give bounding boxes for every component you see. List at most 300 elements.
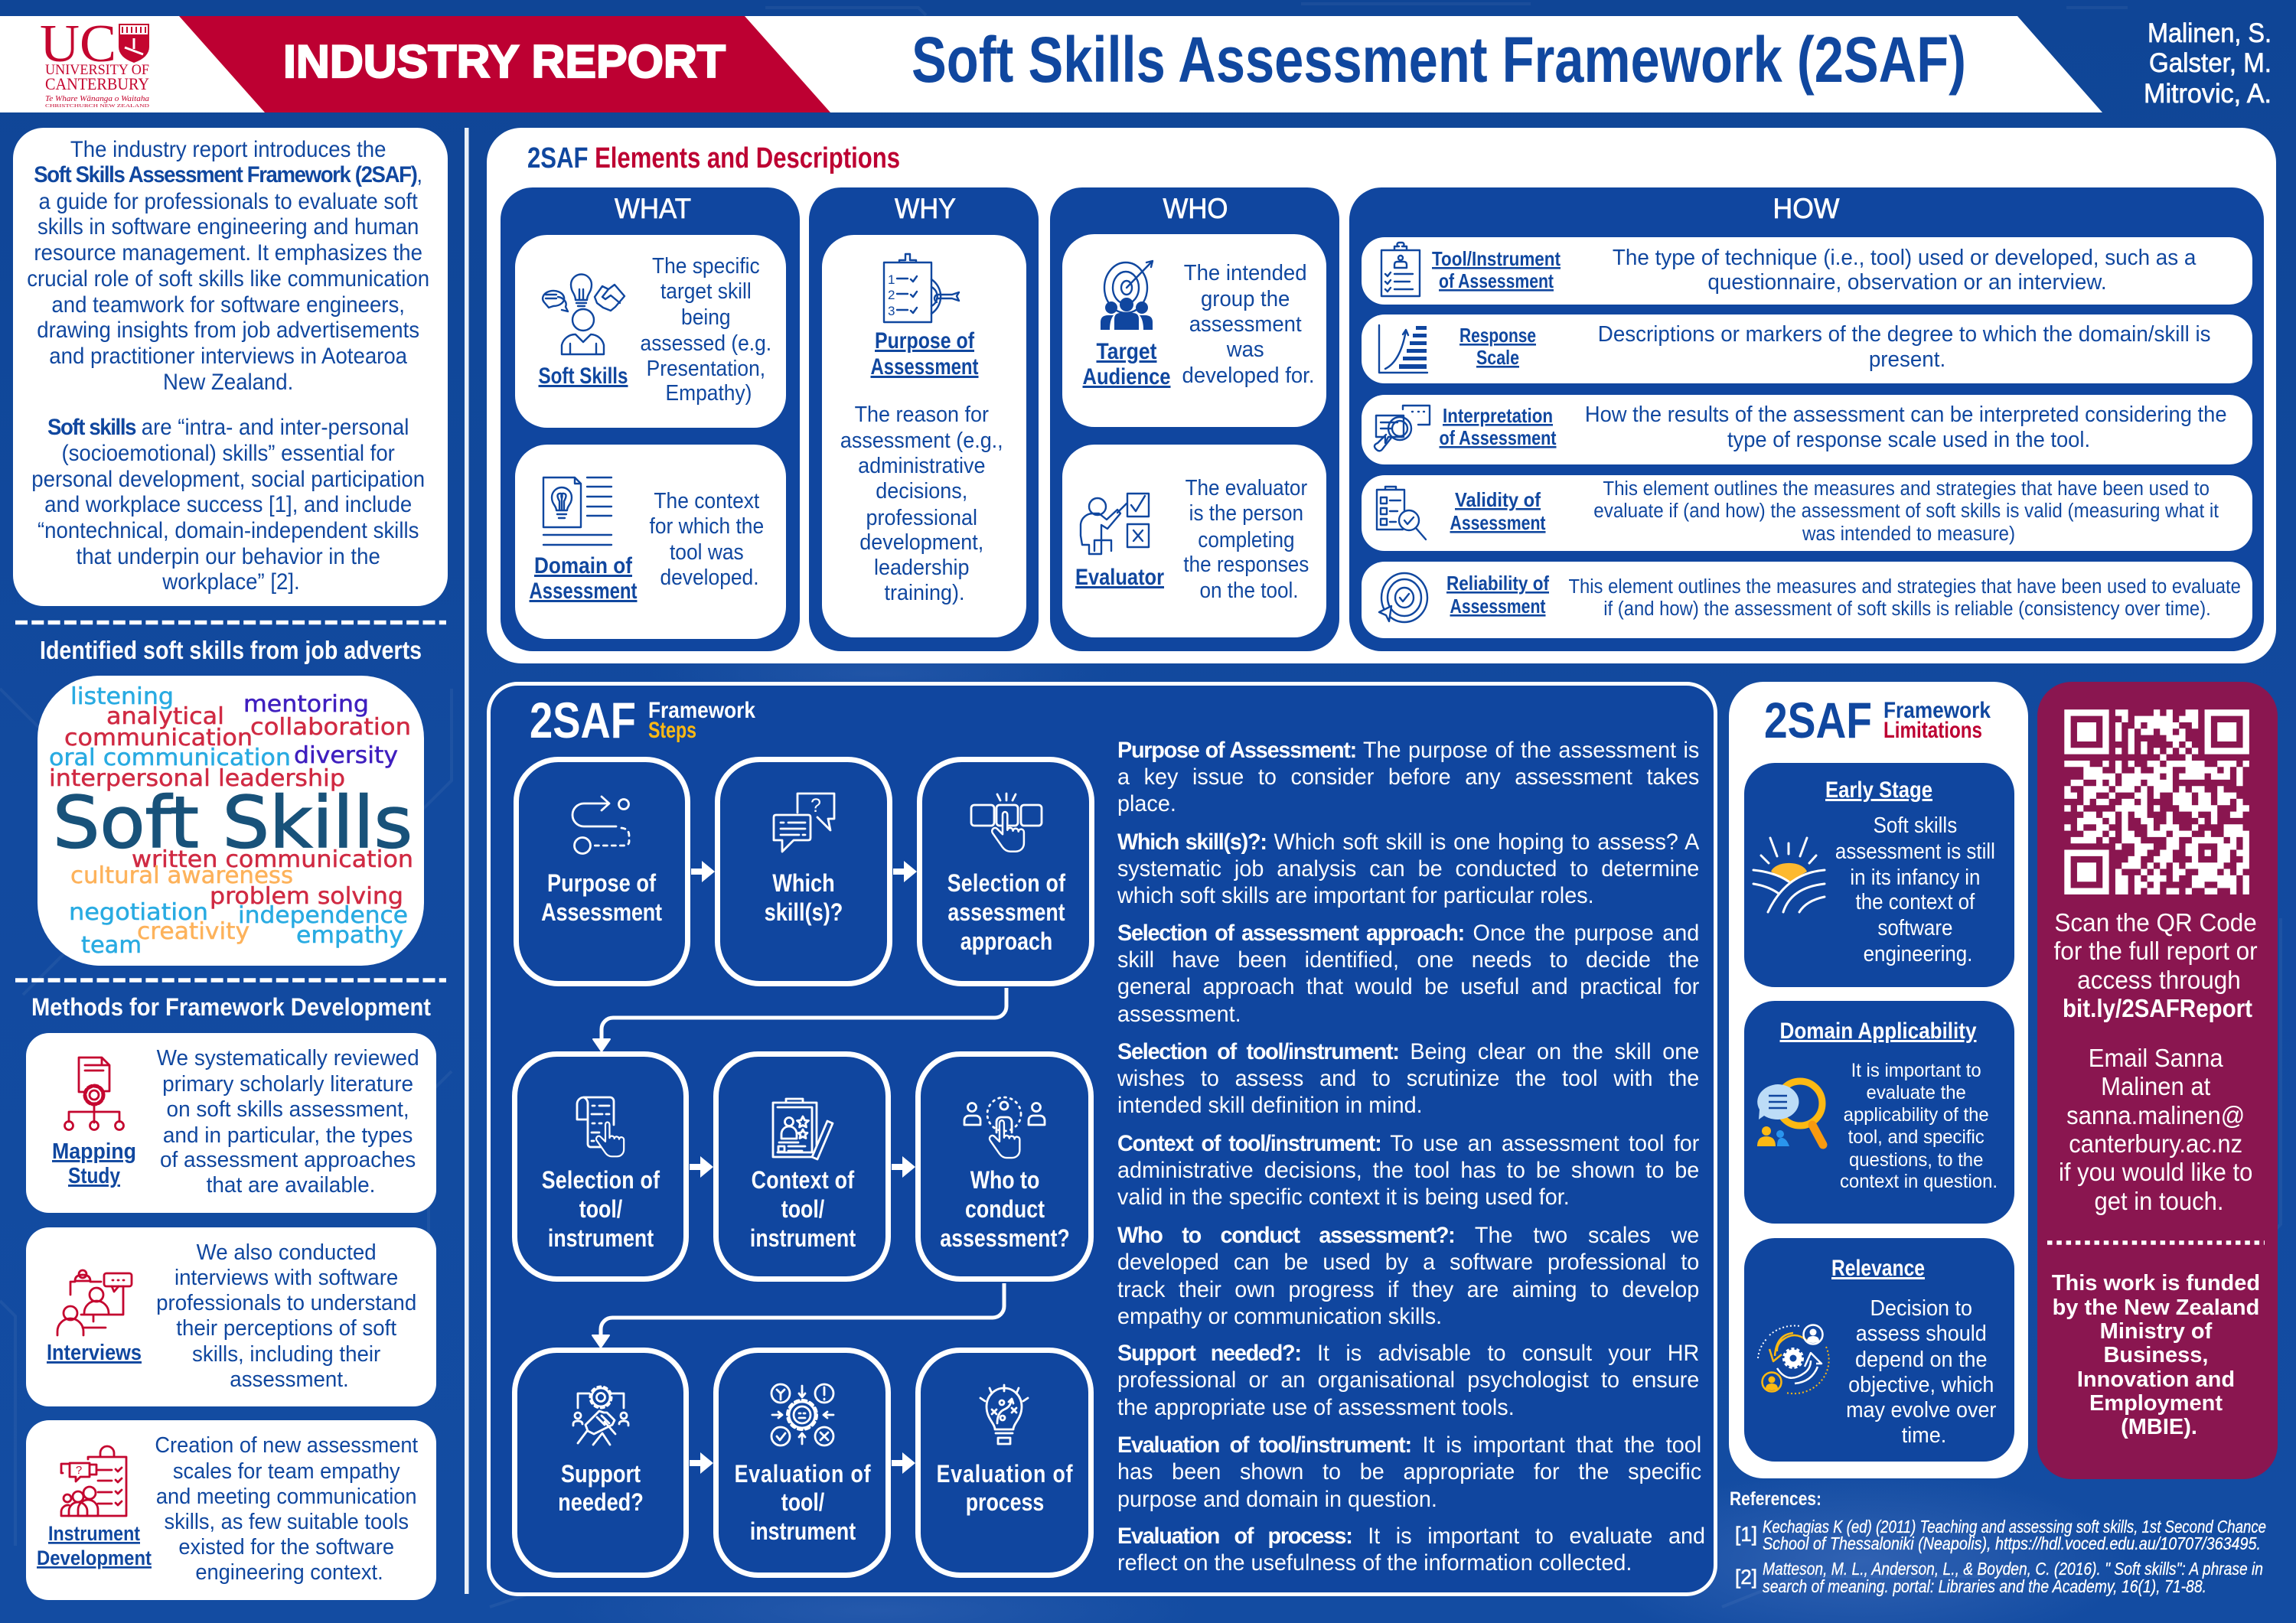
step description: which skills <box>1117 829 1699 908</box>
text: early stage: in its infancy in <box>1850 865 1980 889</box>
icon: interviews <box>57 1270 132 1335</box>
text: contact email: sanna.malinen@ <box>2066 1101 2245 1129</box>
text: instrument development: existed for the software <box>178 1534 394 1559</box>
label: reliability: Reliability of <box>1446 572 1549 595</box>
step description: selection of assessment approach: general approach that would be useful and practical for <box>1117 974 1699 999</box>
step description: evaluation of tool/instrument: purpose and domain in question. <box>1117 1487 1437 1512</box>
text: contact email: get in touch. <box>2095 1187 2223 1215</box>
label: reliability <box>1446 572 1549 618</box>
card: domain of assessment <box>515 445 786 639</box>
text: funding statement: (MBIE). <box>2121 1415 2197 1439</box>
step: evaluation of process <box>918 1350 1091 1575</box>
icon: people selection <box>964 1097 1045 1158</box>
word cloud: team <box>81 932 142 959</box>
introduction text: skills in software engineering and human <box>38 214 419 240</box>
icon: evaluation gear <box>771 1384 833 1445</box>
heading: WHO: WHO <box>1163 193 1228 224</box>
label: Context of <box>752 1167 854 1194</box>
word cloud: analytical <box>106 703 224 730</box>
text: soft skills: assessed (e.g. <box>641 331 771 355</box>
introduction text: Soft Skills Assessment Framework (2SAF), <box>34 162 422 187</box>
step description: selection of assessment approach: assessment. <box>1117 1002 1241 1027</box>
header red ribbon <box>179 16 830 112</box>
references: References: <box>1730 1488 1821 1510</box>
icon: instrument development: ? <box>76 1464 82 1477</box>
text: evaluator: The evaluator <box>1186 475 1307 500</box>
card: purpose of assessment <box>822 235 1026 637</box>
arrow: connector row 1 to row 2 <box>593 988 1006 1051</box>
introduction text: New Zealand. <box>163 370 293 395</box>
logo: University of Canterbury: CANTERBURY <box>45 74 149 93</box>
label: needed? <box>558 1489 644 1517</box>
main title: Soft Skills Assessment Framework (2SAF) <box>912 24 1966 96</box>
icon: instrument development <box>61 1446 126 1516</box>
text: domain applicability: questions, to the <box>1849 1150 1983 1171</box>
text: relevance: may evolve over <box>1846 1397 1996 1422</box>
text: interviews: their perceptions of soft <box>176 1315 396 1341</box>
introduction text: crucial role of soft skills like communication <box>27 266 429 292</box>
icon: clipboard and pencil <box>773 1099 833 1159</box>
heading: identified soft skills: Identified soft skills from job adverts <box>40 636 422 664</box>
word cloud <box>38 676 424 966</box>
text: purpose of assessment: development, <box>859 530 983 554</box>
step description: purpose of assessment: Purpose of Assessment: The purpose of the assessment is <box>1117 738 1699 762</box>
step description: support needed: professional or an organisational psychologist to ensure <box>1117 1367 1699 1393</box>
label: target audience: Audience <box>1082 364 1171 389</box>
word cloud: diversity <box>294 742 398 769</box>
label: tool/instrument: of Assessment <box>1439 269 1554 292</box>
text: contact email: canterbury.ac.nz <box>2069 1129 2242 1158</box>
panel: interviews <box>26 1227 436 1406</box>
row: reliability of assessment <box>1362 562 2252 638</box>
text: funding statement: by the New Zealand <box>2053 1295 2259 1320</box>
panel: instrument development <box>26 1420 436 1600</box>
label: validity <box>1450 488 1546 534</box>
text: funding statement: Employment <box>2089 1391 2223 1416</box>
icon: magnifier with chat <box>1757 1081 1823 1146</box>
introduction text: and workplace success [1], and include <box>44 492 412 517</box>
label: interviews: Interviews <box>47 1341 142 1365</box>
label: conduct <box>965 1196 1045 1224</box>
text: early stage: software <box>1877 915 1952 940</box>
label: purpose of assessment <box>871 328 979 380</box>
step description: which skills: Which skill(s)?: Which soft skill is one hoping to assess? A <box>1117 829 1699 854</box>
text: validity: This element outlines the measures and strategies that have been used to <box>1603 477 2210 500</box>
text: mapping study: We systematically reviewed <box>157 1046 419 1071</box>
panel: WHO <box>1050 187 1339 651</box>
text: response scale: present. <box>1869 347 1945 372</box>
references: [1] <box>1735 1523 1757 1546</box>
step description: which skills: systematic job analysis can be conducted to determine <box>1117 856 1699 882</box>
label: approach <box>960 928 1052 956</box>
text: purpose of assessment: administrative <box>858 453 985 477</box>
step description: evaluation of process: reflect on the usefulness of the information collected. <box>1117 1550 1632 1576</box>
step description: context of tool/instrument: Context of tool/instrument: To use an assessment tool for <box>1117 1131 1699 1155</box>
step description: selection of tool/instrument: Selection of tool/instrument: Being clear on the skill one <box>1117 1039 1699 1064</box>
header white strip <box>0 16 2102 112</box>
icon: validity <box>1377 487 1426 539</box>
panel: introduction <box>13 128 448 606</box>
label: Evaluation of <box>735 1461 871 1488</box>
step description: selection of tool/instrument <box>1117 1039 1699 1118</box>
step description: selection of tool/instrument: intended skill definition in mind. <box>1117 1093 1423 1118</box>
text: purpose of assessment: assessment (e.g., <box>840 428 1003 452</box>
arrow <box>892 1452 915 1474</box>
text: interpretation: type of response scale used in the tool. <box>1727 426 2090 451</box>
word cloud: cultural awareness <box>70 862 293 889</box>
label: purpose of assessment: Assessment <box>871 354 979 380</box>
row: validity of assessment <box>1362 475 2252 551</box>
panel: 2SAF elements and descriptions <box>487 128 2276 663</box>
text: soft skills: Presentation, <box>647 356 765 380</box>
authors: Galster, M. <box>2149 48 2272 78</box>
icon: handshake and gear <box>573 1387 628 1445</box>
step description: who to conduct assessment: track their own progress if they are aiming to develop <box>1117 1277 1699 1302</box>
icon: evaluator <box>1081 494 1149 554</box>
word cloud: independence <box>238 902 408 929</box>
text: relevance: assess should <box>1856 1321 1987 1345</box>
text: QR instructions: Scan the QR Code <box>2054 908 2257 937</box>
label: tool/ <box>579 1196 622 1224</box>
text: instrument development: engineering context. <box>195 1559 383 1584</box>
step: context of tool/instrument <box>716 1054 888 1279</box>
card: domain applicability <box>1744 1001 2014 1224</box>
arrow <box>690 1452 713 1474</box>
text: mapping study: primary scholarly literature <box>162 1072 413 1097</box>
card: soft skills <box>515 235 786 428</box>
icon: lightbulb strategy <box>980 1385 1028 1444</box>
icon: purpose of assessment: 2 <box>888 288 895 302</box>
label: assessment? <box>940 1225 1070 1253</box>
text: early stage: the context of <box>1856 889 1975 914</box>
text: domain of assessment: developed. <box>660 565 759 589</box>
step: purpose of assessment <box>516 759 687 984</box>
row: tool/instrument of assessment <box>1362 237 2252 305</box>
label: interpretation: Interpretation <box>1443 404 1553 427</box>
heading: 2SAF framework steps: 2SAF <box>530 692 636 748</box>
text: early stage: assessment is still <box>1835 839 1995 863</box>
introduction text: workplace” [2]. <box>161 569 300 595</box>
step description: purpose of assessment <box>1117 738 1699 816</box>
icon: reliability <box>1379 573 1427 622</box>
label: assessment <box>947 899 1065 927</box>
panel: framework steps <box>488 684 1716 1595</box>
icon: chat question: ? <box>810 795 821 816</box>
label: tool/ <box>781 1196 824 1224</box>
card: early stage <box>1744 763 2014 987</box>
icon: selection hand <box>971 794 1042 852</box>
introduction text: resource management. It emphasizes the <box>34 240 422 266</box>
text: QR instructions: for the full report or <box>2054 937 2258 965</box>
label: instrument development: Development <box>37 1546 152 1569</box>
label: validity: Assessment <box>1450 511 1546 534</box>
label: domain applicability: Domain Applicability <box>1780 1018 1977 1044</box>
step description: selection of assessment approach: Selection of assessment approach: Once the purpose and <box>1117 920 1699 946</box>
step description: evaluation of tool/instrument <box>1117 1432 1701 1512</box>
step description: who to conduct assessment: Who to conduct assessment?: The two scales we <box>1117 1223 1699 1248</box>
icon: response scale <box>1379 325 1427 373</box>
text: interviews: We also conducted <box>197 1240 377 1265</box>
heading: 2SAF framework limitations: Limitations <box>1883 718 1982 743</box>
heading: 2SAF framework steps <box>530 692 755 748</box>
label: target audience: Target <box>1096 339 1157 364</box>
panel: framework limitations <box>1729 682 2028 1478</box>
heading: 2SAF framework limitations: 2SAF <box>1764 692 1872 748</box>
step description: selection of assessment approach <box>1117 920 1699 1027</box>
word cloud: creativity <box>137 918 249 945</box>
authors <box>2144 18 2272 109</box>
QR code <box>2064 709 2249 895</box>
label: Evaluation of <box>937 1461 1073 1488</box>
text: interviews: professionals to understand <box>156 1290 416 1315</box>
word cloud: negotiation <box>69 899 208 926</box>
introduction text: and teamwork for software engineers, <box>51 292 405 318</box>
text: funding statement: Business, <box>2103 1343 2208 1367</box>
text: domain applicability: tool, and specific <box>1848 1127 1985 1148</box>
text: target audience: assessment <box>1189 311 1302 336</box>
text: evaluator: completing <box>1198 527 1294 552</box>
text: soft skills: Empathy) <box>666 380 752 405</box>
icon: soft skills <box>543 274 625 354</box>
text: reliability: if (and how) the assessment of soft skills is reliable (consistency over time). <box>1603 598 2211 620</box>
icon: domain of assessment <box>543 477 612 545</box>
heading: methods for framework development: Methods for Framework Development <box>31 993 431 1021</box>
label: tool/instrument <box>1432 247 1561 292</box>
text: funding statement: This work is funded <box>2052 1271 2260 1295</box>
label: instrument development: Instrument <box>48 1522 140 1545</box>
icon: route <box>572 797 629 854</box>
step description: support needed <box>1117 1341 1699 1420</box>
label: Support <box>561 1461 641 1488</box>
introduction text: “nontechnical, domain-independent skills <box>38 518 419 543</box>
label: tool/ <box>781 1489 824 1517</box>
step: who to conduct assessment <box>918 1054 1091 1279</box>
label: domain of assessment <box>530 553 638 604</box>
word cloud: empathy <box>296 922 403 949</box>
label: Selection of <box>542 1167 660 1194</box>
card: target audience <box>1062 234 1326 427</box>
text: purpose of assessment: training). <box>885 580 964 605</box>
step description: purpose of assessment: place. <box>1117 791 1176 816</box>
word cloud: Soft Skills <box>53 781 413 864</box>
word cloud: listening <box>70 683 174 710</box>
text: domain applicability: applicability of the <box>1844 1105 1989 1126</box>
text: relevance: time. <box>1902 1423 1946 1447</box>
text: mapping study: of assessment approaches <box>160 1148 416 1172</box>
word cloud: oral communication <box>49 745 291 771</box>
heading: 2SAF elements and descriptions: 2SAF Elements and Descriptions <box>527 142 900 174</box>
logo: University of Canterbury: UC <box>40 15 116 73</box>
text: instrument development: scales for team empathy <box>173 1458 400 1483</box>
panel: HOW <box>1349 187 2264 651</box>
text: contact email: if you would like to <box>2059 1158 2252 1186</box>
label: reliability: Assessment <box>1450 595 1546 618</box>
step description: who to conduct assessment: developed can be used by a software professional to <box>1117 1250 1699 1275</box>
label: Which <box>772 870 835 898</box>
label: instrument development <box>37 1522 152 1569</box>
references: search of meaning. portal: Libraries and the Academy, 16(1), 71-88. <box>1763 1576 2206 1596</box>
step description: evaluation of tool/instrument: has been shown to be appropriate for the specific <box>1117 1459 1701 1484</box>
icon: tool/instrument <box>1381 243 1420 296</box>
step description: who to conduct assessment: empathy or communication skills. <box>1117 1304 1442 1329</box>
label: Purpose of <box>547 870 656 898</box>
text: relevance: depend on the <box>1855 1347 1987 1371</box>
text: relevance: Decision to <box>1870 1295 1972 1320</box>
step: support needed <box>514 1350 686 1575</box>
text: target audience: group the <box>1201 285 1290 311</box>
step description: evaluation of process <box>1117 1524 1705 1576</box>
text: evaluator: on the tool. <box>1199 578 1299 602</box>
word cloud: interpersonal leadership <box>49 765 345 792</box>
introduction text: personal development, social participation <box>31 467 425 492</box>
icon: mapping study document and gear <box>64 1058 124 1129</box>
text: response scale: Descriptions or markers of the degree to which the domain/skill is <box>1598 321 2211 347</box>
step description: which skills: which soft skills are important for particular roles. <box>1117 883 1594 908</box>
icon: scroll hand <box>577 1097 624 1156</box>
step description: evaluation of tool/instrument: Evaluation of tool/instrument: It is important that the tool <box>1117 1432 1701 1458</box>
label: validity: Validity of <box>1455 488 1541 511</box>
heading: HOW: HOW <box>1773 193 1840 224</box>
arrow <box>691 861 715 882</box>
text: instrument development: Creation of new assessment <box>155 1432 418 1457</box>
text: funding statement: Innovation and <box>2077 1367 2235 1392</box>
text: mapping study: on soft skills assessment, <box>167 1097 409 1122</box>
label: tool/instrument: Tool/Instrument <box>1432 247 1561 270</box>
text: domain applicability: evaluate the <box>1867 1083 1966 1103</box>
icon: purpose of assessment <box>884 254 959 322</box>
references: [2] <box>1735 1566 1757 1589</box>
label: purpose of assessment: Purpose of <box>875 328 975 354</box>
text: soft skills: The specific <box>652 253 760 278</box>
heading: 2SAF framework limitations: Framework <box>1883 698 1991 723</box>
step description: who to conduct assessment <box>1117 1223 1699 1329</box>
introduction text: The industry report introduces the <box>70 137 386 162</box>
text: relevance: objective, which <box>1848 1372 1994 1396</box>
step: selection of assessment approach <box>920 759 1091 984</box>
authors: Malinen, S. <box>2148 18 2272 48</box>
text: purpose of assessment: decisions, <box>876 478 967 503</box>
text: domain of assessment: for which the <box>650 513 764 538</box>
label: interpretation: of Assessment <box>1439 426 1557 449</box>
step: evaluation of tool/instrument <box>716 1350 888 1575</box>
logo: University of Canterbury <box>40 15 150 109</box>
text: domain of assessment: The context <box>654 488 760 513</box>
text: contact email: Malinen at <box>2101 1072 2210 1100</box>
word cloud: communication <box>64 725 253 751</box>
icon: sunrise <box>1753 838 1825 912</box>
text: target audience: developed for. <box>1182 362 1314 387</box>
text: domain applicability: context in question. <box>1840 1172 1998 1192</box>
arrow <box>892 1156 915 1178</box>
introduction text: Soft skills are “intra- and inter-personal <box>47 415 409 440</box>
introduction text: (socioemotional) skills” essential for <box>61 441 395 466</box>
word cloud: mentoring <box>243 691 369 718</box>
row: response scale <box>1362 314 2252 383</box>
text: target audience: was <box>1226 336 1264 361</box>
logo: University of Canterbury: UNIVERSITY OF <box>45 62 149 78</box>
ribbon heading: INDUSTRY REPORT: INDUSTRY REPORT <box>283 36 726 87</box>
text: early stage: Soft skills <box>1874 813 1957 837</box>
text: target audience: The intended <box>1184 259 1307 285</box>
icon: chat question <box>774 794 834 852</box>
link: bit.ly/2SAFReport: bit.ly/2SAFReport <box>2063 994 2252 1022</box>
row: interpretation of assessment <box>1362 395 2252 464</box>
heading: WHY: WHY <box>895 193 956 224</box>
step description: selection of assessment approach: skill have been identified, one needs to decide the <box>1117 947 1699 973</box>
references <box>1730 1488 2266 1596</box>
panel: WHY <box>809 187 1039 651</box>
label: relevance: Relevance <box>1831 1256 1925 1281</box>
card: evaluator <box>1062 445 1326 637</box>
text: instrument development: skills, as few suitable tools <box>164 1509 409 1533</box>
introduction text: a guide for professionals to evaluate soft <box>38 189 418 214</box>
label: early stage: Early Stage <box>1825 777 1932 803</box>
text: soft skills: target skill <box>660 279 752 303</box>
text: instrument development: and meeting communication <box>156 1484 417 1508</box>
text: purpose of assessment: professional <box>866 505 977 530</box>
label: instrument <box>548 1225 654 1253</box>
introduction text: and practitioner interviews in Aotearoa <box>49 344 408 369</box>
text: soft skills: being <box>681 305 731 329</box>
label: interpretation <box>1439 404 1557 449</box>
label: soft skills: Soft Skills <box>539 363 628 389</box>
label: Who to <box>970 1167 1039 1194</box>
text: tool/instrument: questionnaire, observation or an interview. <box>1707 269 2107 295</box>
text: early stage: engineering. <box>1864 941 1972 966</box>
text: evaluator: is the person <box>1189 500 1303 525</box>
label: response scale: Response <box>1459 324 1536 347</box>
panel: contact and funding <box>2037 682 2278 1479</box>
label: domain of assessment: Domain of <box>534 553 633 578</box>
text: tool/instrument: The type of technique (i.e., tool) used or developed, such as a <box>1613 245 2197 270</box>
heading: WHAT: WHAT <box>615 193 691 224</box>
text: mapping study: that are available. <box>207 1173 375 1198</box>
text: validity: was intended to measure) <box>1802 523 2015 545</box>
arrow <box>690 1156 713 1178</box>
label: mapping study <box>52 1139 136 1188</box>
icon: target audience <box>1104 261 1153 313</box>
arrow: connector row 2 to row 3 <box>592 1283 1004 1348</box>
label: mapping study: Mapping <box>52 1139 136 1164</box>
heading: 2SAF framework steps: Steps <box>648 718 696 743</box>
text: funding statement: Ministry of <box>2100 1319 2213 1344</box>
label: response scale: Scale <box>1476 346 1519 369</box>
label: instrument <box>750 1225 856 1253</box>
icon: interpretation <box>1375 406 1430 451</box>
label: Selection of <box>947 870 1065 898</box>
icon: cycle with people <box>1758 1325 1829 1393</box>
logo: University of Canterbury: CHRISTCHURCH NEW ZEALAND <box>45 103 149 109</box>
text: validity: evaluate if (and how) the assessment of soft skills is valid (measuring what it <box>1593 500 2219 522</box>
heading: 2SAF framework steps: Framework <box>648 698 755 723</box>
step description: support needed: the appropriate use of assessment tools. <box>1117 1395 1515 1420</box>
word cloud: written communication <box>132 846 413 873</box>
label: Assessment <box>541 899 662 927</box>
header banner <box>0 15 2272 112</box>
step description: evaluation of process: Evaluation of process: It is important to evaluate and <box>1117 1524 1705 1549</box>
panel: mapping study <box>26 1033 436 1213</box>
step: selection of tool/instrument <box>514 1054 686 1279</box>
authors: Mitrovic, A. <box>2144 79 2272 109</box>
icon: purpose of assessment: 1 <box>888 272 895 287</box>
text: purpose of assessment: leadership <box>874 555 969 579</box>
step description: context of tool/instrument: administrative decisions, the tool has to be shown to be <box>1117 1158 1699 1183</box>
step: which skills <box>718 759 889 984</box>
text: mapping study: and in particular, the types <box>163 1123 413 1148</box>
step description: support needed: Support needed?: It is advisable to consult your HR <box>1117 1341 1699 1366</box>
panel: WHAT <box>501 187 800 651</box>
arrow <box>893 861 917 882</box>
